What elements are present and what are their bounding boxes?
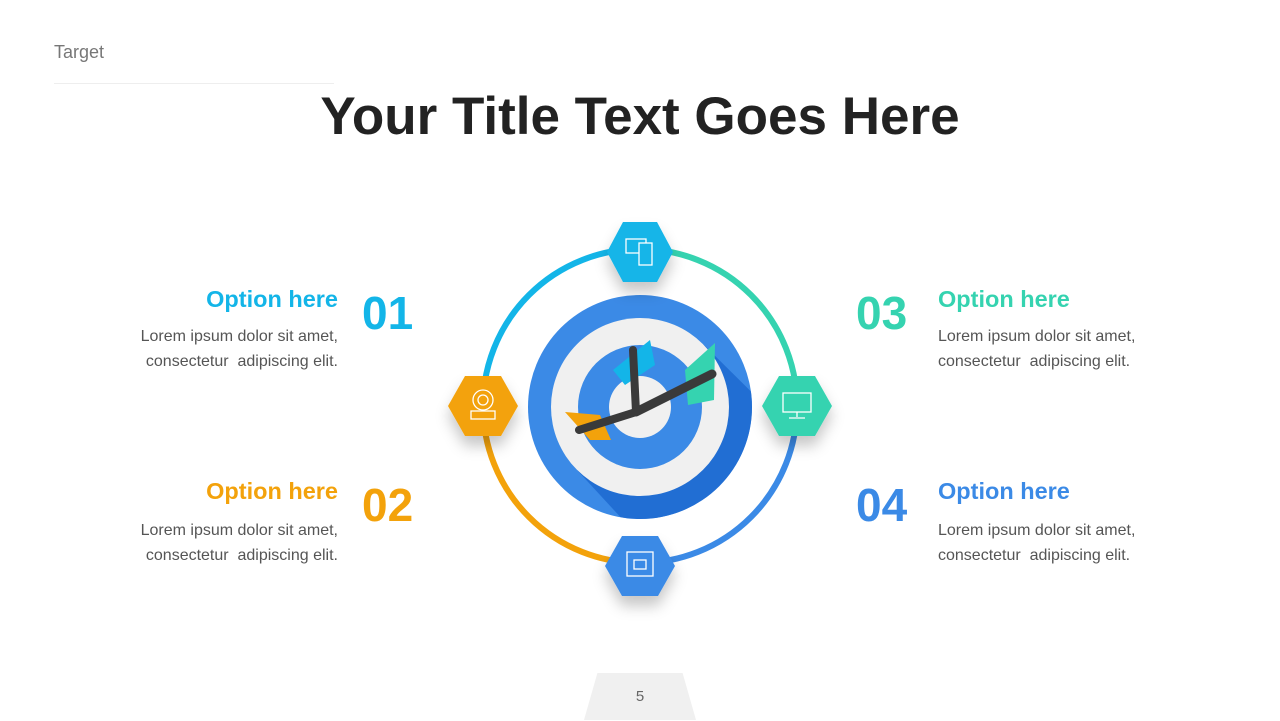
hexagon bottom xyxy=(605,536,675,596)
option 02: 02 xyxy=(362,479,413,531)
option 02: consectetur adipiscing elit. xyxy=(146,547,338,564)
option 01: 01 xyxy=(362,287,413,339)
option 04: consectetur adipiscing elit. xyxy=(938,547,1130,564)
central diagram xyxy=(444,222,836,613)
option 03: Option here xyxy=(938,286,1070,312)
option 02: Option here xyxy=(206,478,338,504)
option 02: Lorem ipsum dolor sit amet, xyxy=(141,522,338,539)
option 04: 04 xyxy=(856,479,907,531)
option 03: 03 xyxy=(856,287,907,339)
option 04 xyxy=(856,478,1135,564)
option 02 xyxy=(141,478,413,564)
page number tab: 5 xyxy=(636,688,644,705)
option 03: consectetur adipiscing elit. xyxy=(938,353,1130,370)
darts xyxy=(565,340,715,440)
hexagon left xyxy=(448,376,518,436)
option 01: consectetur adipiscing elit. xyxy=(146,353,338,370)
page number tab xyxy=(584,673,696,720)
hexagon right xyxy=(762,376,832,436)
title: Your Title Text Goes Here xyxy=(320,87,960,146)
section label: Target xyxy=(54,42,104,62)
option 01: Option here xyxy=(206,286,338,312)
outer ring xyxy=(483,249,797,563)
hexagon top xyxy=(607,222,673,282)
target xyxy=(528,295,752,519)
option 04: Lorem ipsum dolor sit amet, xyxy=(938,522,1135,539)
option 01 xyxy=(141,286,413,370)
option 01: Lorem ipsum dolor sit amet, xyxy=(141,328,338,345)
option 04: Option here xyxy=(938,478,1070,504)
option 03: Lorem ipsum dolor sit amet, xyxy=(938,328,1135,345)
option 03 xyxy=(856,286,1135,370)
